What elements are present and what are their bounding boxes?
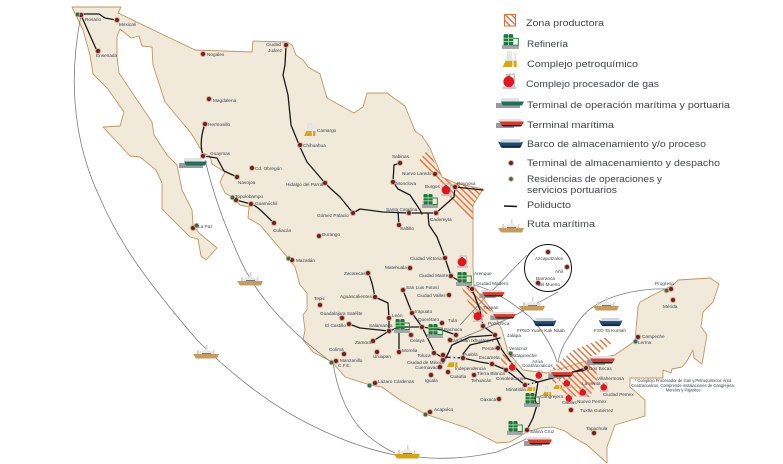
city labels: Santa Catarina (386, 207, 418, 212)
city labels: Puebla (463, 352, 478, 357)
callout: Mexico City inset: Añil (555, 269, 563, 274)
city labels: Navojoa (238, 180, 256, 185)
city labels: Tuxpan (483, 305, 499, 310)
storage terminal markers (78, 12, 676, 436)
city labels: FPSO Yuum Kak Naab (517, 328, 565, 333)
city labels: Pachuca (444, 327, 463, 332)
city labels: San Luis Potosí (406, 285, 440, 290)
city labels: Independencia (455, 366, 486, 371)
city labels: Colima (329, 347, 344, 352)
callout: Mexico City inset: del Muerto (538, 282, 561, 287)
city labels: Jalapa (507, 333, 521, 338)
legend: Poliducto (527, 200, 571, 211)
city labels: Ensenada (96, 53, 118, 58)
city labels: Querétaro (418, 317, 439, 322)
city labels: Morelia (402, 348, 418, 353)
city labels: Guamúchil (255, 201, 277, 206)
city labels: Nogales (207, 52, 225, 57)
legend: Refinería (527, 39, 569, 50)
petrochemical icons (304, 123, 562, 396)
city labels: Ciudad Madero (476, 281, 508, 286)
city labels: Tapachula (586, 426, 608, 431)
city labels: Coatzacoalcos (522, 363, 553, 368)
city labels: Cactus (562, 400, 577, 405)
callout: Mexico City inset: Azcapotzalco (535, 256, 563, 261)
city labels: Tehuacán (471, 378, 492, 383)
city labels: Perote (482, 346, 496, 351)
city labels: Nuevo Laredo (402, 171, 432, 176)
city labels: Escamela (479, 355, 500, 360)
city labels: Zamora (355, 340, 372, 345)
city labels: Camargo (317, 128, 337, 133)
city labels: Mexicali (119, 22, 136, 27)
city labels: Lázaro Cárdenas (378, 379, 415, 384)
city labels: Salina Cruz (530, 429, 555, 434)
city labels: Villahermosa (597, 376, 624, 381)
city labels: Guadalajara Satélite (320, 311, 363, 316)
city labels: Guaymas (210, 151, 231, 156)
legend: Terminal de operación marítima y portuaria (527, 100, 731, 111)
callout: Mexico City inset (524, 244, 572, 292)
city labels: Cuernavaca (415, 365, 441, 370)
city labels: Chihuahua (303, 143, 326, 148)
city labels: Tula (448, 318, 457, 323)
refinery icons (394, 194, 540, 435)
city labels: Salamanca (369, 323, 393, 328)
gas processing icons (441, 184, 608, 403)
city labels: Progreso (655, 281, 674, 286)
city labels: Uruapan (373, 354, 391, 359)
city labels: Ciudad Pemex (603, 392, 634, 397)
city labels: C.F.E. (338, 363, 351, 368)
city labels: FSO Ta Kuntah (594, 328, 626, 333)
city labels: Irapuato (415, 309, 433, 314)
city labels: Ciudad Victoria (410, 256, 442, 261)
maritime routes (74, 15, 667, 458)
city labels: Manzanillo (340, 358, 363, 363)
pipelines (81, 14, 588, 430)
city labels: Rosario (85, 17, 102, 22)
city labels: Iguala (425, 378, 438, 383)
city labels: Aguascalientes (340, 294, 372, 299)
city labels: La Venta (582, 381, 601, 386)
city labels: Reynosa (457, 181, 476, 186)
legend: Terminal de almacenamiento y despacho (527, 158, 720, 169)
city labels: Acapulco (434, 407, 454, 412)
city labels: Mazatlán (296, 258, 315, 263)
legend: Complejo petroquímico (527, 59, 638, 70)
city labels: Ciudad de México (407, 360, 445, 365)
ships on the map (179, 158, 622, 458)
callout: Mexico City inset: Barranca (536, 276, 555, 281)
footnote: * Complejo Procesador de Gas y Petroquímicos Área (635, 378, 732, 383)
city labels: Magdalena (213, 98, 237, 103)
legend: Residencias de operaciones y (527, 174, 662, 185)
legend: Barco de almacenamiento y/o proceso (527, 139, 706, 150)
footnote (631, 378, 735, 392)
city labels: Matehuala (385, 265, 407, 270)
city labels: Celaya (410, 338, 425, 343)
port residence markers (75, 12, 669, 417)
legend: Terminal marítima (527, 120, 615, 131)
city labels: Cd. Obregón (255, 166, 282, 171)
footnote: Morelos y Pajaritos (666, 388, 700, 392)
city labels: Ciudad Valles (417, 293, 446, 298)
city labels: Toluca (417, 353, 431, 358)
city labels: Cangrejera (540, 394, 564, 399)
legend (496, 14, 731, 232)
city labels: Culiacán (273, 228, 292, 233)
city labels: Juárez (268, 48, 283, 53)
city labels: León (392, 313, 403, 318)
legend: Complejo procesador de gas (526, 79, 659, 90)
city labels: Lerma (638, 340, 652, 345)
city labels: Mérida (663, 304, 678, 309)
city labels: Ciudad Mante (419, 273, 449, 278)
city labels: Tepic (314, 296, 326, 301)
legend: Ruta marítima (527, 219, 596, 230)
city labels: Hermosillo (208, 122, 231, 127)
legend: servicios portuarios (527, 185, 617, 196)
city labels: Tuxtla Gutiérrez (580, 408, 614, 413)
city labels: Topolobampo (235, 194, 264, 199)
footnote: Coatzacoalcos, Comprende instalaciones de Cangrejera, (631, 383, 735, 388)
city labels: Minatitlán (506, 387, 526, 392)
city labels: Sabinas (392, 154, 410, 159)
city labels: Campeche (642, 334, 665, 339)
city labels: Arenque (474, 271, 492, 276)
city labels: Ciudad (266, 42, 281, 47)
city labels: Gómez Palacio (317, 213, 349, 218)
city labels: Oaxaca (480, 397, 497, 402)
city labels: Veracruz (509, 346, 528, 351)
city labels: Poza Rica (488, 321, 510, 326)
city labels: Burgos (425, 184, 441, 189)
city labels: Cuautla (450, 374, 467, 379)
legend: Zona productora (526, 18, 605, 29)
city labels: El Castillo (325, 323, 346, 328)
city labels: Azúa (532, 359, 543, 364)
city labels: Tierra Blanca (477, 371, 505, 376)
city labels: Monclova (396, 181, 416, 186)
city labels: Matapionche (510, 353, 537, 358)
city labels: Cosoleacaque (496, 376, 526, 381)
city labels: Hidalgo del Parral (286, 182, 323, 187)
city labels: Cadereyta (430, 217, 452, 222)
city labels: Zacatecas (344, 271, 366, 276)
city labels: La Paz (198, 224, 213, 229)
city labels: San Juan Ixhuatepec (450, 338, 495, 343)
city labels: Durango (322, 232, 340, 237)
city labels: Nuevo Pemex (577, 399, 607, 404)
producing zones hatching (419, 149, 612, 397)
city labels: Dos Bocas (589, 366, 612, 371)
city labels (85, 17, 678, 434)
city labels: Saltillo (400, 226, 414, 231)
